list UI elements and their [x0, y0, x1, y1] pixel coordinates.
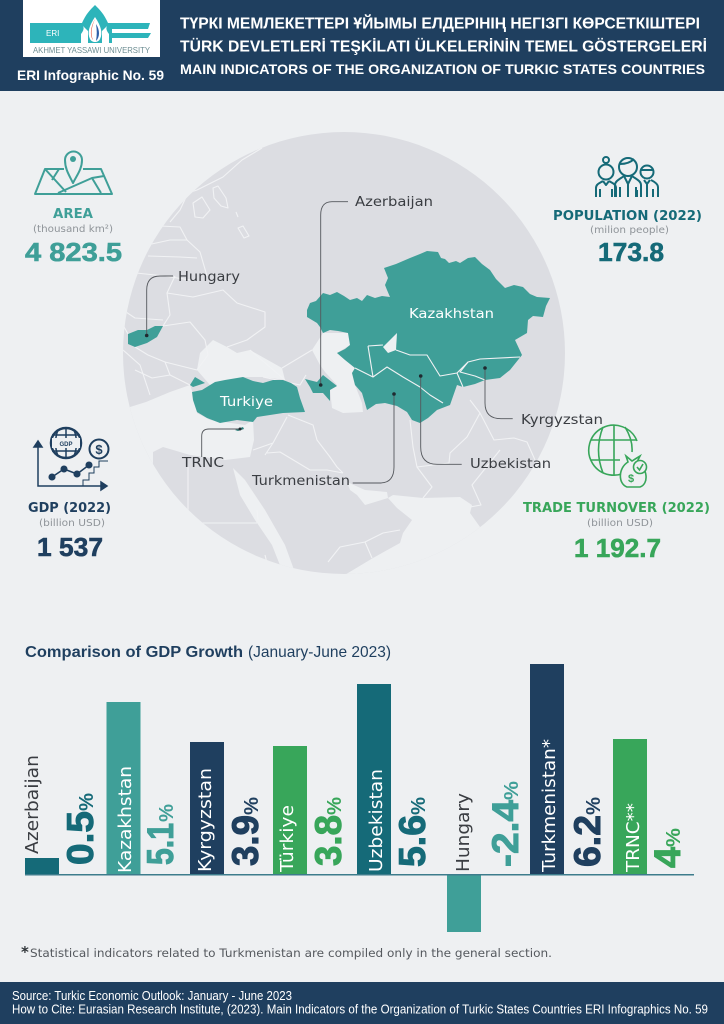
callout: Hungary: Hungary	[178, 270, 240, 285]
logo: AKHMET YASSAWI UNIVERSITY	[33, 45, 150, 55]
bar: TRNC: 4	[646, 847, 688, 868]
stat: GDP: $	[95, 442, 103, 457]
chart title	[25, 644, 391, 661]
bar: Turkmenistan: Turkmenistan*	[539, 739, 560, 873]
title: Kazakh: ТҮРКІ МЕМЛЕКЕТТЕРІ ҰЙЫМЫ ЕЛДЕРІНІҢ НЕГІЗГІ КӨРСЕТКІШТЕРІ	[180, 14, 700, 32]
bar: TRNC	[613, 739, 688, 875]
stat: GDP	[28, 428, 111, 562]
stat: GDP: GDP (2022)	[28, 501, 111, 516]
callout: Kyrgyzstan	[483, 366, 603, 428]
bar: Turkmenistan	[530, 664, 608, 875]
bar: Turkmenistan: %	[583, 797, 605, 815]
footer band	[0, 982, 724, 1024]
bar: Kazakhstan: 5.1	[139, 823, 181, 865]
bar: Türkiye: Türkiye	[277, 805, 298, 873]
bar: Azerbaijan: %	[76, 793, 98, 811]
bar: Hungary: -2.4	[484, 800, 526, 867]
bar: Hungary: %	[501, 781, 523, 800]
header band	[0, 0, 724, 91]
icon: globe and money bag	[589, 425, 646, 487]
icon: GDP chart	[34, 428, 108, 490]
chart title: Comparison of GDP Growth	[25, 644, 243, 661]
bar: Kazakhstan: Kazakhstan	[115, 766, 136, 873]
footnote: *	[21, 943, 29, 961]
bar: Kyrgyzstan	[190, 742, 266, 875]
bar: Kyrgyzstan: Kyrgyzstan	[195, 768, 216, 872]
stat: GDP: (billion USD)	[39, 518, 105, 529]
bar: Azerbaijan: 0.5	[59, 811, 101, 865]
stat: GDP: GDP	[59, 442, 73, 448]
callout: Azerbaijan	[319, 195, 433, 387]
bar: Kazakhstan	[106, 702, 181, 875]
bar: Kyrgyzstan: %	[241, 797, 263, 815]
bar: Kyrgyzstan: 3.9	[224, 815, 266, 866]
bar: Hungary: Hungary	[453, 793, 474, 872]
title: Turkish: TÜRK DEVLETLERİ TEŞKİLATI ÜLKELERİNİN TEMEL GÖSTERGELERİ	[180, 36, 707, 56]
stat: trade turnover: 1 192.7	[574, 533, 661, 563]
bar: Uzbekistan	[357, 684, 433, 875]
title: English: MAIN INDICATORS OF THE ORGANIZATION OF TURKIC STATES COUNTRIES	[180, 61, 705, 77]
bar: Kazakhstan: %	[156, 804, 178, 822]
bar: Türkiye: 3.8	[307, 815, 349, 866]
stat: population	[553, 157, 702, 267]
callout: Kyrgyzstan: Kyrgyzstan	[521, 413, 603, 428]
callout: Azerbaijan: Azerbaijan	[355, 195, 433, 210]
stat: trade turnover: $	[628, 473, 634, 485]
country: Türkiye	[190, 377, 305, 423]
bar: Türkiye	[273, 746, 349, 875]
land disc	[123, 132, 565, 574]
stat: GDP: 1 537	[37, 532, 103, 562]
stat: area	[25, 152, 122, 267]
stat: area: (thousand km²)	[33, 224, 113, 235]
country: TRNC	[235, 427, 244, 431]
map	[110, 132, 603, 600]
logo	[23, 0, 160, 57]
bar: Turkmenistan: 6.2	[566, 815, 608, 867]
country: Hungary	[128, 326, 163, 347]
footnote: Statistical indicators related to Turkmenistan are compiled only in the general section.	[30, 946, 552, 960]
chart title: (January-June 2023)	[248, 644, 391, 661]
label: Kazakhstan: Kazakhstan	[409, 307, 494, 322]
stat: trade turnover: TRADE TURNOVER (2022)	[523, 501, 710, 516]
bar: Türkiye: %	[324, 797, 346, 815]
bar: Uzbekistan: 5.6	[391, 815, 433, 867]
country: Kazakhstan, Uzbekistan, Turkmenistan, Kyrgyzstan	[307, 251, 550, 423]
bar: TRNC: %	[663, 828, 685, 847]
callout: Uzbekistan: Uzbekistan	[470, 457, 551, 472]
stat: trade turnover	[523, 425, 710, 563]
callout: Hungary	[145, 270, 240, 337]
label: Türkiye: Turkiye	[219, 395, 273, 410]
callout: TRNC: TRNC	[181, 456, 224, 471]
bar: TRNC: TRNC**	[623, 803, 644, 873]
stat: area: 4 823.5	[25, 237, 122, 267]
icon: map with pin	[35, 152, 112, 194]
bar chart: GDP growth	[22, 664, 694, 932]
country borders	[123, 148, 535, 575]
footer band: Source: Turkic Economic Outlook: January - June 2023	[12, 989, 292, 1003]
callout: Turkmenistan	[251, 392, 396, 489]
callout: Uzbekistan	[419, 374, 551, 472]
stat: trade turnover: (billion USD)	[587, 518, 653, 529]
bar: Azerbaijan: Azerbaijan	[22, 755, 43, 854]
infographic number: ERI Infographic No. 59	[17, 67, 164, 83]
stat: area: AREA	[53, 207, 93, 222]
seas	[130, 333, 480, 574]
callout: Turkmenistan: Turkmenistan	[251, 474, 350, 489]
callout: TRNC	[181, 428, 242, 471]
bar: Azerbaijan	[22, 755, 101, 875]
bar: Uzbekistan: %	[408, 797, 430, 815]
bar: Hungary	[447, 781, 526, 932]
stat: population: POPULATION (2022)	[553, 209, 702, 224]
stat: population: 173.8	[598, 237, 664, 267]
bar: Uzbekistan: Uzbekistan	[366, 769, 387, 872]
country: Azerbaijan	[305, 375, 337, 401]
stat: population: (milion people)	[590, 225, 669, 236]
logo: ERI	[46, 29, 59, 38]
icon: three people	[596, 157, 658, 197]
